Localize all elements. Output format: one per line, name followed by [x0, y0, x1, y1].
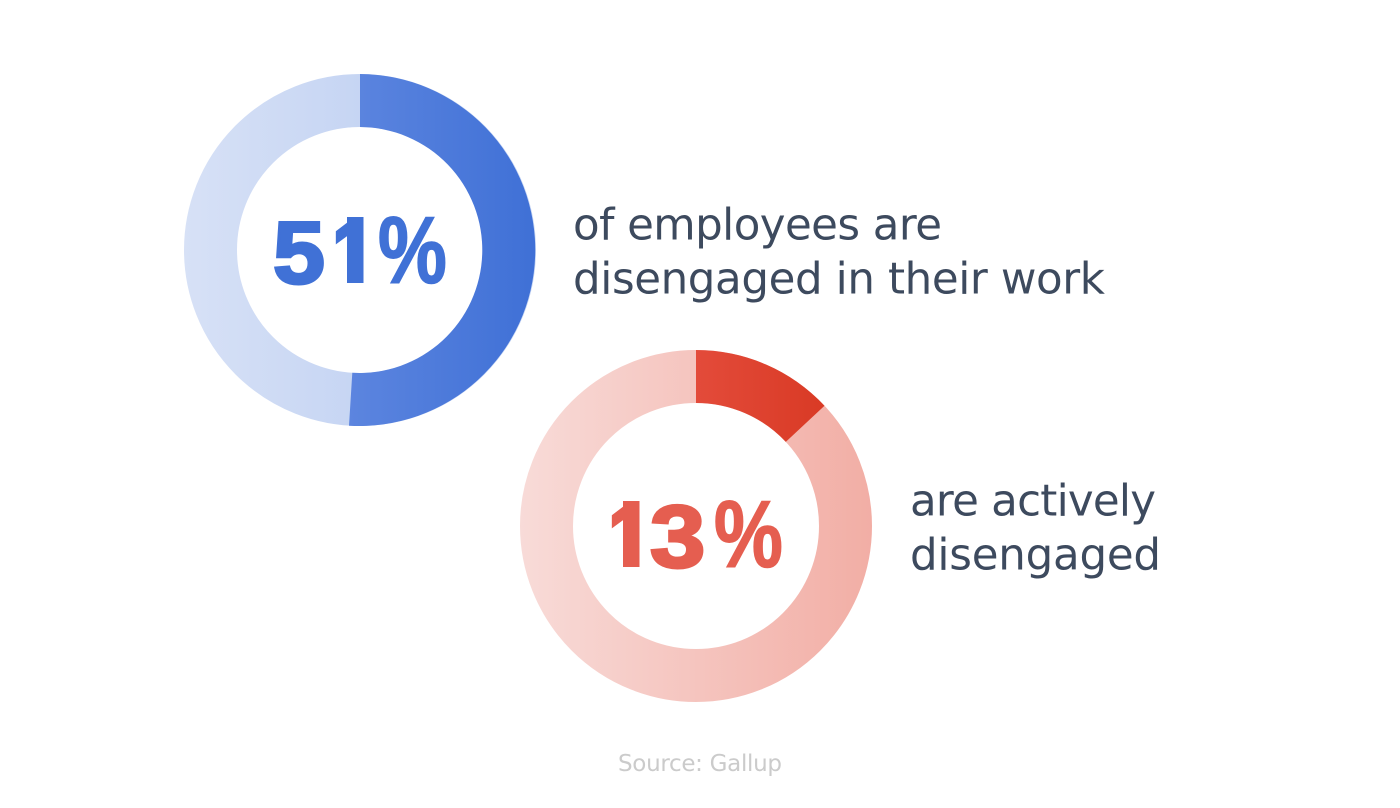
- text: actively disengaged: disengaged: [910, 530, 1161, 580]
- statistic: 51%: %: [378, 199, 447, 304]
- donut chart: 13%: [546, 350, 846, 676]
- statistic: 51%: 5: [273, 204, 325, 302]
- statistic: 13%: [602, 483, 783, 588]
- statistic: 51%: 1: [332, 204, 374, 302]
- text: employees disengaged: disengaged in their work: [573, 254, 1106, 304]
- text: actively disengaged: [910, 476, 1161, 580]
- statistic: 13%: 3: [650, 487, 705, 586]
- text: employees disengaged: of employees are: [573, 200, 942, 250]
- text: employees disengaged: [573, 200, 1106, 304]
- donut chart: 51%: [210, 74, 535, 426]
- statistic: 13%: 1: [608, 488, 650, 586]
- text: actively disengaged: are actively: [910, 476, 1156, 526]
- source: Source: Gallup: [618, 751, 782, 777]
- statistic: 13%: %: [714, 483, 783, 588]
- statistic: 51%: [273, 199, 447, 304]
